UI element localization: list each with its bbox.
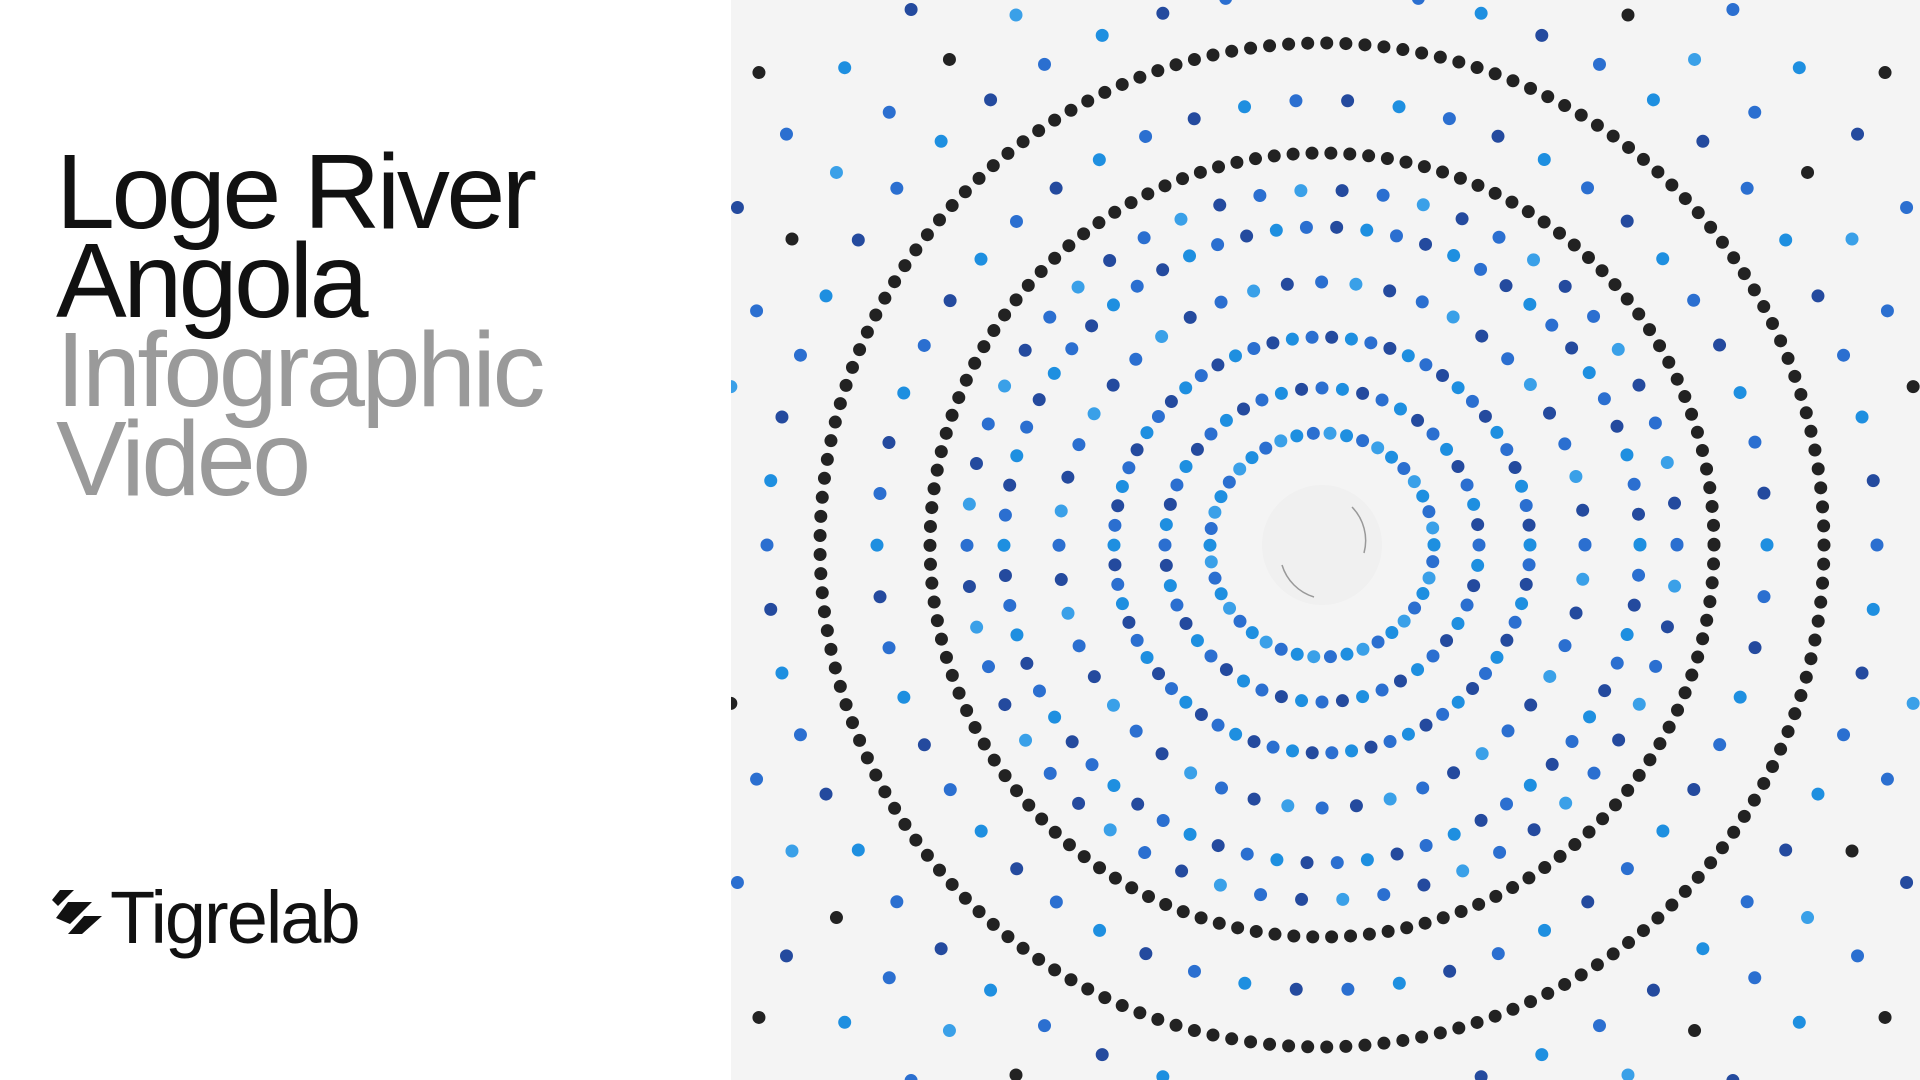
title: Angola <box>56 222 365 340</box>
center disc <box>1262 485 1382 605</box>
title: Video <box>56 400 308 518</box>
panel: dot rings <box>731 0 1920 1080</box>
icon: stripes <box>52 890 102 934</box>
title <box>56 133 543 518</box>
title: Loge River <box>56 133 534 251</box>
logo: Tigrelab: Tigrelab <box>110 876 359 959</box>
title: Infographic <box>56 311 542 429</box>
